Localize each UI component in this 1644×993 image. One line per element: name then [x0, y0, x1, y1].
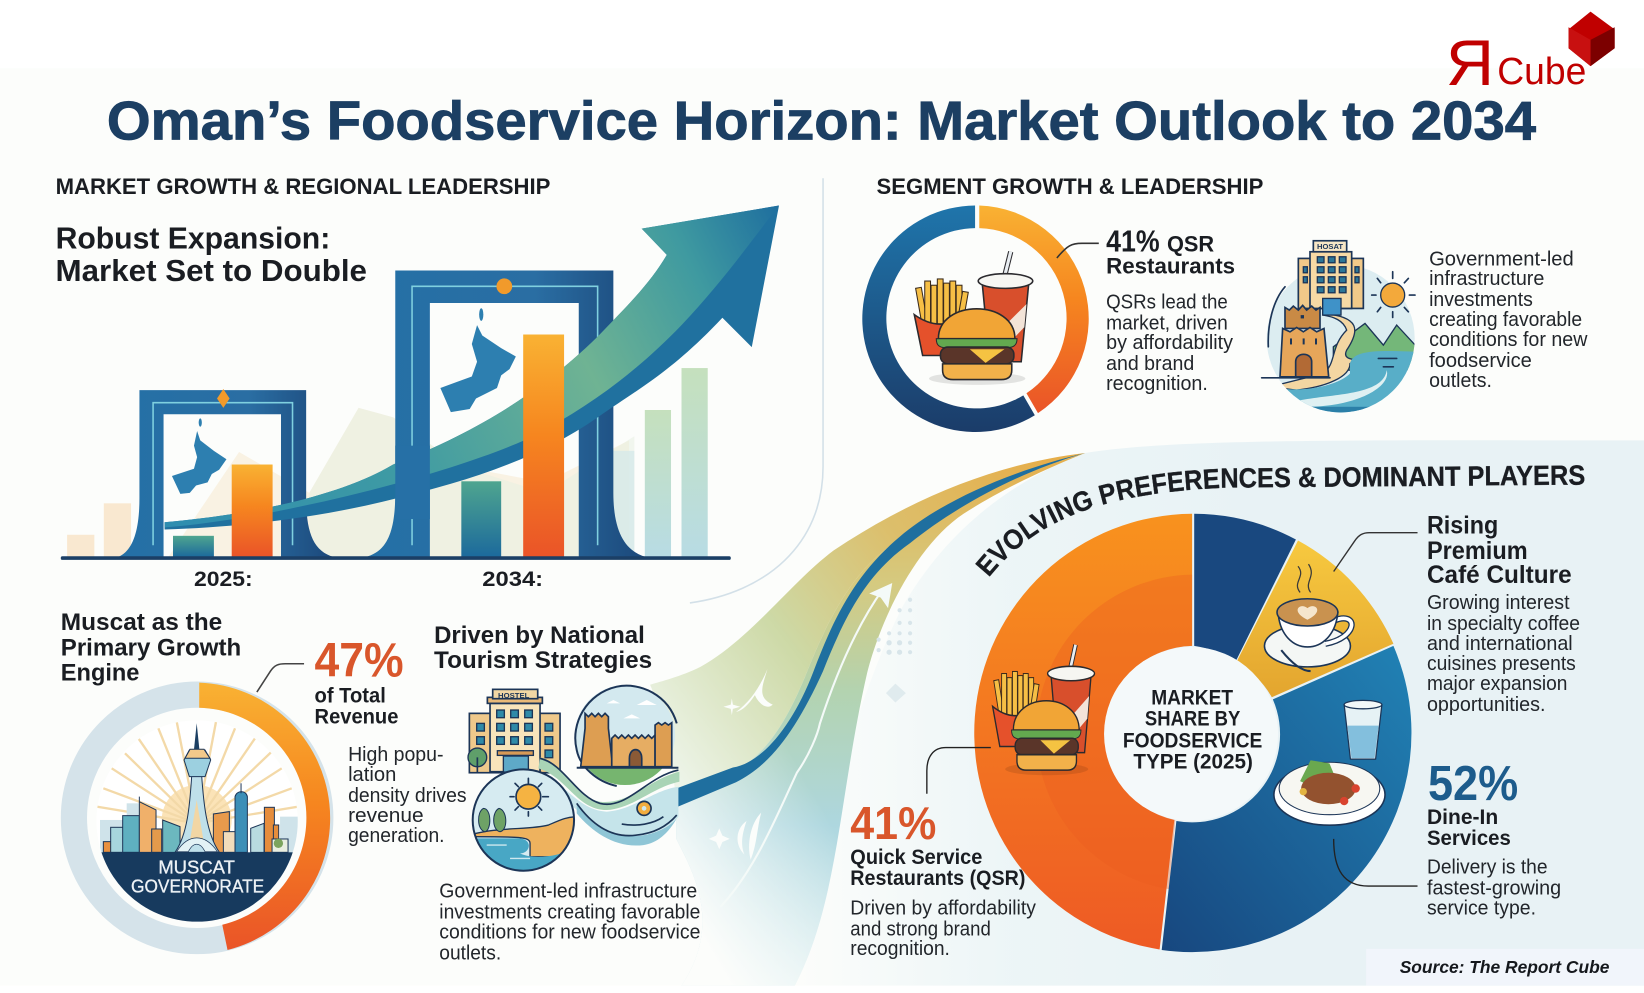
text: rising premium cafe culture: Premium [1427, 537, 1528, 565]
muscat description: High popu- [348, 744, 444, 766]
icon: burger fries and drink [914, 252, 1033, 385]
heading: national tourism strategies: Driven by National [434, 622, 645, 649]
text: dine-in services: Dine-In [1427, 806, 1498, 829]
text: quick service restaurants [850, 797, 1036, 960]
text: rising premium cafe culture: cuisines presents [1427, 653, 1576, 675]
logo: RCube: Я [1446, 26, 1494, 99]
logo: RCube: Cube [1497, 50, 1586, 92]
gate 2034 [362, 271, 650, 558]
text: quick service restaurants: 41% [850, 797, 936, 849]
center label: SHARE BY [1145, 708, 1240, 731]
section heading: segment growth: SEGMENT GROWTH & LEADERSHIP [877, 174, 1263, 199]
slice: QSR [974, 514, 1192, 949]
center label: FOODSERVICE [1123, 730, 1262, 753]
callout line: QSR [1057, 243, 1099, 258]
hostel building [468, 689, 560, 773]
slice: premium [1194, 514, 1296, 663]
QSR stat text: 41% [1106, 225, 1160, 259]
slice: cafe [1236, 541, 1393, 697]
infrastructure description: infrastructure [1429, 268, 1544, 290]
chart: market growth gates and arrow [61, 206, 779, 560]
year label 2034: 2034: [482, 568, 543, 591]
QSR stat text: Restaurants [1106, 254, 1235, 279]
text: quick service restaurants: recognition. [850, 938, 950, 960]
QSR description: QSRs lead the [1106, 291, 1228, 313]
QSR description: market, driven [1106, 312, 1228, 334]
QSR ring chart [862, 206, 1089, 432]
text: rising premium cafe culture: Café Culture [1427, 561, 1572, 589]
icon: hotel fort and coast: HOSAT [1317, 242, 1344, 251]
text: dine-in services: fastest-growing [1427, 877, 1561, 899]
text: quick service restaurants: Driven by affordability [850, 897, 1036, 919]
muscat description: lation [348, 764, 396, 786]
subheading: robust expansion [56, 221, 367, 288]
center label: TYPE (2025) [1133, 751, 1253, 774]
bars 2025 [173, 465, 273, 557]
pale side bars [67, 368, 708, 557]
heading: muscat [61, 609, 241, 687]
text: dine-in services: 52% [1428, 756, 1518, 811]
text: dine-in services [1427, 756, 1561, 919]
beach vignette [470, 767, 577, 873]
Oman map 2034 [440, 308, 516, 412]
center label: MARKET [1151, 687, 1233, 710]
heading: muscat: Primary Growth [61, 634, 241, 661]
tourism description: Government-led infrastructure [439, 881, 697, 903]
stat: 47% of total revenue [315, 633, 404, 728]
heading: muscat: Muscat as the [61, 609, 222, 636]
muscat description: generation. [348, 825, 445, 847]
gate 2025 [115, 389, 338, 558]
icon: water glass [1344, 700, 1382, 759]
infrastructure description: Government-led [1429, 248, 1574, 270]
center label [1104, 647, 1278, 821]
market share pie chart [974, 514, 1411, 952]
heading: muscat: Engine [61, 660, 139, 687]
subheading: robust expansion: Robust Expansion: [56, 221, 330, 256]
white swoosh arrow [720, 583, 892, 907]
muscat description: density drives [348, 785, 467, 807]
QSR stat text [1106, 225, 1235, 279]
tourism description: conditions for new foodservice [439, 921, 700, 943]
Oman map 2025 [172, 418, 226, 494]
muscat label: MUSCAT [158, 856, 235, 877]
muscat label: GOVERNORATE [131, 875, 264, 896]
stat: 47% of total revenue: of Total [315, 685, 386, 708]
year label 2025: 2025: [194, 568, 253, 591]
lower right pale panel [734, 440, 1644, 986]
QSR description [1106, 291, 1233, 395]
heading: national tourism strategies: Tourism Strategies [434, 647, 652, 674]
muscat label [131, 856, 264, 896]
section heading: market growth: MARKET GROWTH & REGIONAL LEADERSHIP [56, 174, 550, 199]
callout line: dine-in [1334, 839, 1418, 886]
stat: 47% of total revenue: Revenue [315, 705, 398, 728]
logo: RCube [1446, 12, 1615, 99]
text: dine-in services: Delivery is the [1427, 856, 1548, 878]
source note: Source: The Report Cube [1400, 957, 1609, 977]
swoosh ribbon [650, 453, 1085, 986]
icon: dinner plate [1274, 760, 1385, 825]
slice: dine-in [1162, 646, 1411, 952]
muscat ring chart [74, 683, 330, 950]
QSR stat text: QSR [1167, 232, 1214, 257]
muscat description: revenue [348, 805, 424, 827]
fort vignette [573, 683, 678, 787]
tourism description [439, 881, 700, 964]
infrastructure description: foodservice [1429, 350, 1532, 372]
curved heading: evolving preferences: EVOLVING PREFERENCES & DOMINANT PLAYERS [975, 465, 1584, 576]
QSR description: recognition. [1106, 373, 1208, 395]
text: quick service restaurants: Restaurants (QSR) [850, 867, 1025, 890]
text: rising premium cafe culture: in specialty coffee [1427, 613, 1580, 635]
growth arrow [165, 206, 779, 530]
source note [1366, 949, 1644, 986]
text: rising premium cafe culture [1427, 512, 1580, 716]
muscat description [348, 744, 467, 847]
hostel building: HOSTEL [498, 691, 530, 700]
text: rising premium cafe culture: opportunities. [1427, 694, 1545, 716]
tourism description: outlets. [439, 942, 501, 964]
sparkles [709, 669, 773, 860]
callout line: premium cafe [1334, 533, 1418, 571]
icon: coffee cup [1264, 564, 1352, 671]
text: rising premium cafe culture: and international [1427, 633, 1573, 655]
infrastructure description: creating favorable [1429, 309, 1582, 331]
subheading: robust expansion: Market Set to Double [56, 253, 367, 288]
callout line: 47% [257, 664, 304, 692]
infrastructure description: outlets. [1429, 370, 1492, 392]
panel outline: market growth [690, 178, 823, 603]
text: dine-in services: Services [1427, 827, 1511, 850]
callout line: QSR share [927, 748, 991, 794]
tourism description: investments creating favorable [439, 902, 700, 924]
muscat skyline illustration [97, 722, 298, 922]
bars 2034 [461, 335, 564, 557]
QSR description: and brand [1106, 353, 1194, 375]
infrastructure description: conditions for new [1429, 329, 1588, 351]
infrastructure description: investments [1429, 289, 1533, 311]
text: quick service restaurants: Quick Service [850, 846, 982, 869]
stat: 47% of total revenue: 47% [315, 633, 404, 687]
text: dine-in services: service type. [1427, 897, 1536, 919]
text: quick service restaurants: and strong brand [850, 918, 991, 940]
QSR description: by affordability [1106, 332, 1233, 354]
icon: hostel fort beach and waves [468, 683, 679, 873]
river waves [533, 757, 679, 846]
title: Oman’s Foodservice Horizon: Market Outlook to 2034 [107, 90, 1537, 151]
icon: burger fries and drink [993, 645, 1094, 775]
heading: national tourism strategies [434, 622, 652, 674]
infrastructure description [1429, 248, 1588, 392]
text: rising premium cafe culture: Rising [1427, 512, 1498, 540]
text: rising premium cafe culture: major expansion [1427, 673, 1567, 695]
icon: hotel fort and coast [1262, 241, 1420, 417]
text: rising premium cafe culture: Growing interest [1427, 592, 1570, 614]
